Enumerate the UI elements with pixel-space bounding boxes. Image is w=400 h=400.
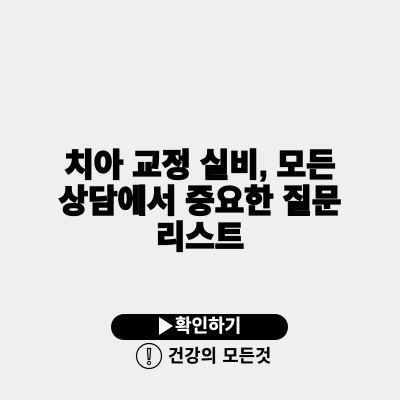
- button: confirm: [111, 314, 288, 340]
- title: 상담에서 중요한 질문: [59, 183, 341, 219]
- button label: 확인하기: [175, 316, 241, 336]
- title: 리스트: [156, 219, 244, 255]
- icon: exclamation circle: [136, 342, 162, 370]
- site name: 건강의 모든것: [168, 346, 272, 366]
- title: 치아 교정 실비, 모든: [64, 147, 336, 183]
- icon: play triangle: [159, 317, 173, 335]
- title: [58, 147, 341, 255]
